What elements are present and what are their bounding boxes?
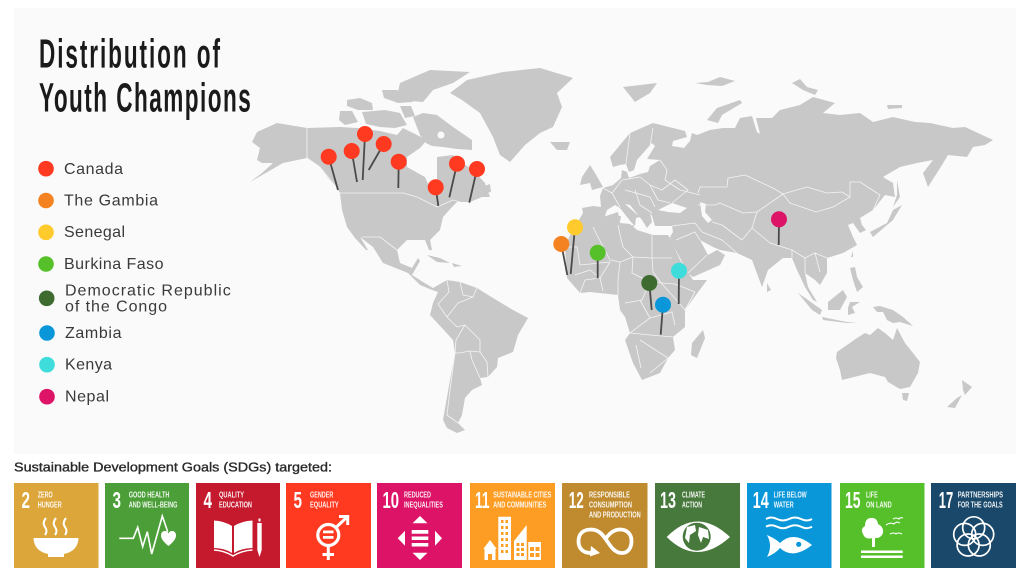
SDG tiles bbox=[14, 483, 1016, 568]
legend: Democratic Republic of the Congo bbox=[39, 283, 231, 316]
pin: Zambia bbox=[655, 297, 671, 335]
SDG 4 tile: QUALITY bbox=[219, 490, 244, 500]
pin: Burkina Faso bbox=[590, 245, 606, 278]
pin: DR Congo bbox=[641, 275, 657, 310]
SDG 10 tile: INEQUALITIES bbox=[404, 500, 443, 510]
SDG 10 tile: REDUCED bbox=[404, 490, 431, 500]
SDG 13 tile: ACTION bbox=[682, 500, 702, 510]
map pins bbox=[321, 126, 787, 335]
pin: Senegal bbox=[567, 219, 583, 274]
greenland bbox=[450, 68, 573, 162]
SDG 11 tile: 11 bbox=[475, 487, 490, 513]
legend: Canada: Canada bbox=[64, 161, 123, 178]
SDG 14 tile bbox=[747, 483, 832, 568]
SDG 4 tile: 4 bbox=[204, 487, 212, 513]
legend: Nepal: Nepal bbox=[65, 388, 109, 406]
legend: Canada bbox=[38, 161, 123, 178]
SDG 2 tile: ZERO bbox=[38, 490, 53, 500]
SDG 15 tile: LIFE bbox=[866, 490, 878, 500]
pins: Canada bbox=[321, 126, 485, 206]
SDG 2 tile: 2 bbox=[22, 487, 30, 513]
legend: Burkina Faso: Burkina Faso bbox=[64, 256, 164, 273]
SDG 5 tile: EQUALITY bbox=[310, 500, 339, 510]
SDG 12 tile: RESPONSIBLE bbox=[589, 490, 630, 500]
SDG 15 tile: ON LAND bbox=[866, 500, 892, 510]
SDG 12 tile: 12 bbox=[569, 487, 584, 513]
legend: Zambia bbox=[39, 325, 122, 342]
world map bbox=[250, 68, 993, 433]
legend: Zambia: Zambia bbox=[65, 325, 122, 342]
SDG 17 tile bbox=[931, 483, 1016, 568]
SDG 15 tile: 15 bbox=[845, 487, 861, 513]
SDG 12 tile bbox=[562, 483, 648, 568]
SDG 12 tile: CONSUMPTION bbox=[589, 500, 632, 510]
SDG 2 tile: HUNGER bbox=[38, 500, 62, 510]
SDG 10 tile bbox=[377, 483, 462, 568]
eurasia bbox=[582, 97, 993, 302]
SDG 4 tile: EDUCATION bbox=[219, 500, 252, 510]
legend bbox=[38, 161, 231, 406]
SDG 12 tile: AND PRODUCTION bbox=[589, 510, 641, 520]
SDG 3 tile bbox=[105, 483, 189, 568]
legend: Kenya bbox=[39, 356, 112, 374]
SDG heading: Sustainable Development Goals (SDGs) targeted: bbox=[14, 460, 332, 475]
pin: Kenya bbox=[671, 263, 687, 304]
SDG 3 tile: 3 bbox=[112, 487, 121, 513]
SDG 5 tile: GENDER bbox=[310, 490, 334, 500]
pin: The Gambia bbox=[553, 236, 569, 275]
legend: Democratic Republic of the Congo: of the Congo bbox=[65, 299, 167, 316]
legend: Nepal bbox=[39, 388, 109, 406]
south america bbox=[430, 280, 528, 433]
SDG 13 tile: CLIMATE bbox=[682, 490, 705, 500]
SDG 5 tile bbox=[286, 483, 371, 568]
SDG 13 tile: 13 bbox=[660, 487, 676, 513]
background panel bbox=[14, 8, 1016, 454]
legend: Democratic Republic of the Congo: Democratic Republic bbox=[65, 283, 231, 300]
legend: Senegal: Senegal bbox=[64, 224, 125, 241]
SDG 14 tile: 14 bbox=[753, 487, 769, 513]
pin: Nepal bbox=[771, 211, 787, 245]
SDG 15 tile bbox=[840, 483, 924, 568]
legend: Kenya: Kenya bbox=[65, 356, 112, 374]
title: Distribution of bbox=[39, 32, 221, 78]
arctic islands bbox=[339, 70, 491, 267]
title: Youth Champions bbox=[39, 76, 251, 122]
title bbox=[39, 32, 251, 122]
north america bbox=[250, 123, 490, 292]
SDG 13 tile bbox=[655, 483, 740, 568]
SDG 2 tile bbox=[14, 483, 98, 568]
legend: The Gambia: The Gambia bbox=[64, 192, 158, 210]
SDG 3 tile: GOOD HEALTH bbox=[129, 490, 169, 500]
africa bbox=[565, 212, 707, 380]
SDG 14 tile: LIFE BELOW bbox=[774, 490, 807, 500]
SDG 11 tile: AND COMMUNITIES bbox=[493, 500, 546, 510]
SDG 17 tile: 17 bbox=[939, 487, 953, 513]
SDG 5 tile: 5 bbox=[294, 487, 302, 513]
SDG 3 tile: AND WELL-BEING bbox=[129, 500, 178, 510]
SDG 4 tile bbox=[196, 483, 280, 568]
country borders bbox=[307, 128, 880, 423]
SDG 10 tile: 10 bbox=[382, 487, 399, 513]
SDG 17 tile: PARTNERSHIPS bbox=[958, 490, 1003, 500]
SDG 11 tile: SUSTAINABLE CITIES bbox=[493, 490, 551, 500]
seas and islands bbox=[550, 77, 972, 408]
SDG 14 tile: WATER bbox=[774, 500, 794, 510]
SDG 11 tile bbox=[470, 483, 555, 568]
